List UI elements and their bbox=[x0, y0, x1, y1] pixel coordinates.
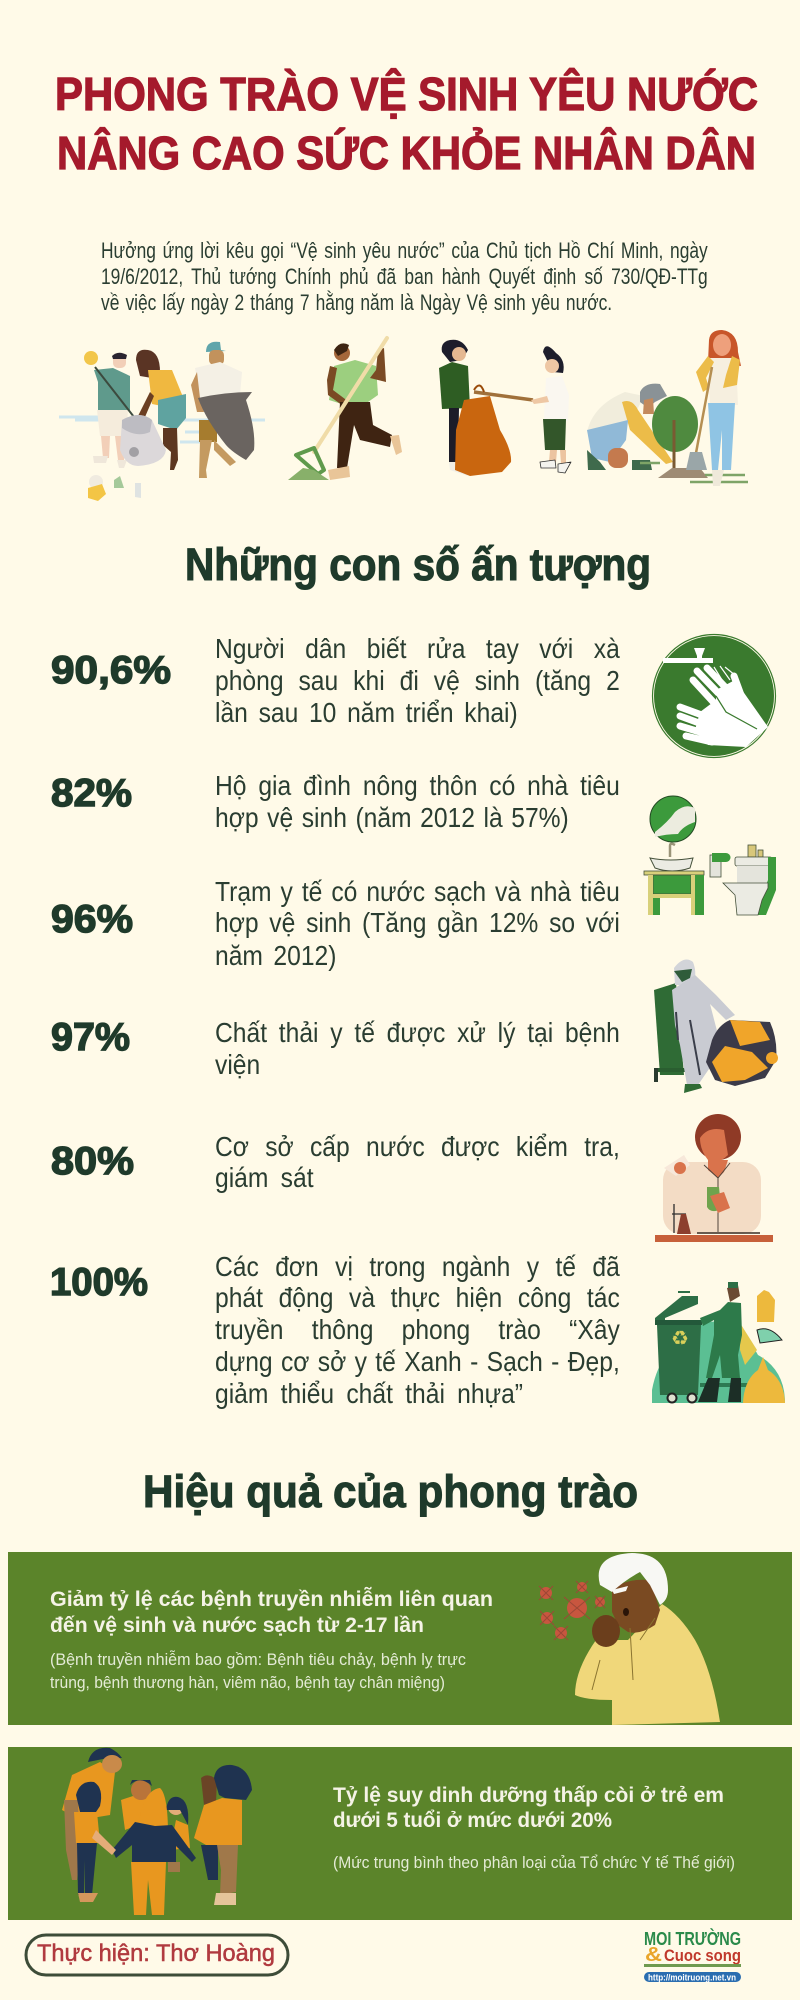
stat numbers: 96% bbox=[51, 898, 133, 941]
logo: Moi Truong va Cuoc song bbox=[644, 1928, 741, 1982]
footer: author credit: Thực hiện: Thơ Hoàng bbox=[37, 1940, 275, 1967]
stat text: health stations: Trạm y tế có nước sạch và nhà tiêu bbox=[215, 876, 620, 907]
figure: person raking bbox=[288, 338, 402, 480]
stat text: hand washing: Người dân biết rửa tay với xà bbox=[215, 633, 620, 664]
stat numbers: 97% bbox=[51, 1016, 130, 1059]
illustration: volunteers cleaning and planting bbox=[59, 330, 748, 501]
logo: Moi Truong va Cuoc song: MOI TRƯỜNG bbox=[644, 1928, 741, 1949]
panel heading: dưới 5 tuổi ở mức dưới 20% bbox=[333, 1809, 612, 1832]
stat text: medical waste: Chất thải y tế được xử lý tại bệnh bbox=[215, 1017, 620, 1048]
stat numbers bbox=[50, 649, 171, 1304]
stat text: hand washing bbox=[215, 633, 620, 728]
panel: disease reduction bbox=[8, 1552, 792, 1725]
logo: Moi Truong va Cuoc song: Cuoc song bbox=[664, 1946, 741, 1965]
stat text: hand washing: lần sau 10 năm triển khai) bbox=[215, 697, 518, 728]
stat text: green clean beautiful campaign: giảm thiểu chất thải nhựa” bbox=[215, 1378, 523, 1409]
stat text: health stations bbox=[215, 876, 620, 971]
stat text: rural latrines bbox=[215, 770, 620, 833]
panel note bbox=[50, 1650, 466, 1692]
panel note: trùng, bệnh thương hàn, viêm não, bệnh tay chân miệng) bbox=[50, 1673, 445, 1692]
stat text: rural latrines: hợp vệ sinh (năm 2012 là 57%) bbox=[215, 802, 569, 833]
stat text: hand washing: phòng sau khi đi vệ sinh (tăng 2 bbox=[215, 665, 620, 696]
footer: author credit bbox=[26, 1935, 288, 1975]
panel heading: đến vệ sinh và nước sạch từ 2-17 lần bbox=[50, 1614, 424, 1637]
logo: Moi Truong va Cuoc song: http://moitruong.net.vn bbox=[648, 1972, 736, 1982]
stat text: green clean beautiful campaign: truyền thông phong trào “Xây bbox=[215, 1314, 620, 1345]
icon: waste collector and recycling bin bbox=[652, 1282, 785, 1403]
icon: waste collector and recycling bin: ♻ bbox=[671, 1328, 689, 1350]
stat text: water supply: giám sát bbox=[215, 1162, 314, 1193]
stat text: water supply bbox=[215, 1131, 620, 1193]
panel note: (Mức trung bình theo phân loại của Tổ chức Y tế Thế giới) bbox=[333, 1853, 735, 1872]
stat numbers: 100% bbox=[50, 1261, 148, 1304]
icon: sink and toilet bbox=[644, 796, 776, 915]
stat text: rural latrines: Hộ gia đình nông thôn có nhà tiêu bbox=[215, 770, 620, 801]
stat text: health stations: năm 2012) bbox=[215, 940, 336, 971]
stat numbers: 90,6% bbox=[51, 649, 171, 692]
title bbox=[55, 68, 758, 179]
logo: Moi Truong va Cuoc song: & bbox=[645, 1944, 662, 1966]
stat text: medical waste: viện bbox=[215, 1049, 260, 1080]
panel heading bbox=[50, 1587, 493, 1637]
stat numbers: 80% bbox=[51, 1140, 134, 1183]
intro paragraph bbox=[101, 238, 708, 315]
stat text: water supply: Cơ sở cấp nước được kiểm tra, bbox=[215, 1131, 620, 1162]
stat text: green clean beautiful campaign: phát động và thực hiện công tác bbox=[215, 1282, 620, 1313]
heading: effectiveness of the movement: Hiệu quả của phong trào bbox=[143, 1466, 638, 1517]
stat text: green clean beautiful campaign: Các đơn vị trong ngành y tế đã bbox=[215, 1251, 620, 1282]
stat text: health stations: hợp vệ sinh (Tăng gần 12% so với bbox=[215, 907, 620, 938]
panel heading: Tỷ lệ suy dinh dưỡng thấp còi ở trẻ em bbox=[333, 1784, 724, 1807]
figure group: litter pickers bbox=[59, 342, 265, 501]
intro paragraph: về việc lấy ngày 2 tháng 7 hằng năm là Ngày Vệ sinh yêu nước. bbox=[101, 290, 612, 315]
intro paragraph: Hưởng ứng lời kêu gọi “Vệ sinh yêu nước” của Chủ tịch Hồ Chí Minh, ngày bbox=[101, 238, 708, 263]
figure: adult and child with waste sack bbox=[439, 340, 571, 476]
intro paragraph: 19/6/2012, Thủ tướng Chính phủ đã ban hành Quyết định số 730/QĐ-TTg bbox=[101, 264, 708, 289]
illustration: group of people bbox=[62, 1748, 252, 1915]
panel note: (Bệnh truyền nhiễm bao gồm: Bệnh tiêu chảy, bệnh lỵ trực bbox=[50, 1650, 466, 1669]
icon: scientist with flask bbox=[655, 1114, 773, 1242]
icon: worker in protective suit bbox=[654, 960, 778, 1093]
heading: impressive figures: Những con số ấn tượng bbox=[185, 539, 651, 590]
stat text: green clean beautiful campaign bbox=[215, 1251, 620, 1409]
panel: child malnutrition bbox=[8, 1747, 792, 1920]
figure: gardener planting a tree bbox=[587, 330, 748, 486]
panel heading: Giảm tỷ lệ các bệnh truyền nhiễm liên quan bbox=[50, 1587, 493, 1611]
stat text: green clean beautiful campaign: dựng cơ sở y tế Xanh - Sạch - Đẹp, bbox=[215, 1346, 620, 1377]
icon: hand washing bbox=[652, 634, 776, 758]
illustration: coughing elder bbox=[539, 1553, 720, 1725]
stat numbers: 82% bbox=[51, 772, 132, 815]
panel heading bbox=[333, 1784, 724, 1832]
stat text: medical waste bbox=[215, 1017, 620, 1080]
